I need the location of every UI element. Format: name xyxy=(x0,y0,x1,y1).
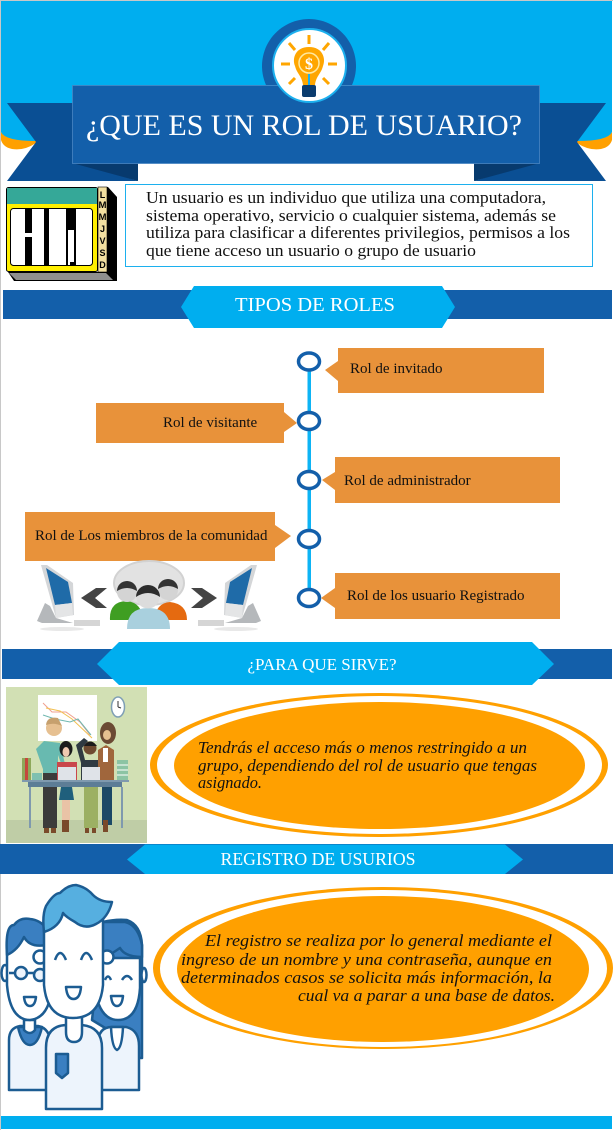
intro text box xyxy=(126,184,592,266)
section heading: para que sirve: ¿PARA QUE SIRVE? xyxy=(248,655,396,674)
intro text box: que tiene acceso un usuario o grupo de usuario xyxy=(146,241,476,260)
role: miembros xyxy=(25,512,291,561)
intro text box: sistema operativo, servicio o cualquier sistema, además se xyxy=(146,206,556,225)
icon: calendar: J xyxy=(100,224,105,234)
section heading: tipos de roles: TIPOS DE ROLES xyxy=(235,294,395,316)
icon: calendar: M xyxy=(98,200,106,210)
section heading: registro xyxy=(0,844,613,874)
icon: calendar: L xyxy=(100,190,106,200)
illustration: three people xyxy=(2,885,146,1109)
icon: calendar: V xyxy=(99,236,106,246)
title: ¿QUE ES UN ROL DE USUARIO? xyxy=(86,109,522,142)
callout: para que sirve: asignado. xyxy=(198,773,262,792)
callout: registro: determinados casos se solicita más información, la xyxy=(181,968,552,987)
footer bar xyxy=(1,1116,612,1129)
role: registrado xyxy=(321,573,560,619)
icon: calendar xyxy=(6,187,117,281)
section heading: registro: REGISTRO DE USURIOS xyxy=(220,849,416,869)
banner ribbon xyxy=(7,86,606,181)
callout: registro: El registro se realiza por lo general mediante el xyxy=(204,931,552,950)
illustration: team at desk xyxy=(6,687,147,843)
intro text box: Un usuario es un individuo que utiliza una computadora, xyxy=(146,188,546,207)
icon: light bulb badge xyxy=(262,19,356,102)
section heading: para que sirve xyxy=(2,642,612,685)
role: invitado: Rol de invitado xyxy=(350,361,442,377)
callout: para que sirve xyxy=(150,693,608,837)
timeline xyxy=(298,353,320,606)
role: registrado: Rol de los usuario Registrado xyxy=(347,588,524,604)
role: administrador: Rol de administrador xyxy=(344,473,471,489)
role: miembros: Rol de Los miembros de la comunidad xyxy=(35,528,268,544)
callout: para que sirve: grupo, dependiendo del rol de usuario que tengas xyxy=(198,756,537,775)
callout: registro xyxy=(153,887,613,1049)
role: visitante xyxy=(96,403,297,443)
illustration: users and computers xyxy=(37,561,261,631)
role: invitado xyxy=(325,348,544,393)
intro text box: utiliza para clasificar a diferentes privilegios, permisos a los xyxy=(146,223,570,242)
header background xyxy=(1,1,612,149)
callout: para que sirve: Tendrás el acceso más o menos restringido a un xyxy=(198,738,527,757)
callout: registro: cual va a parar a una base de datos. xyxy=(298,986,555,1005)
icon: calendar: D xyxy=(99,260,106,270)
role: administrador xyxy=(322,457,560,503)
section heading: tipos de roles xyxy=(3,286,612,328)
icon: calendar: S xyxy=(99,248,106,258)
callout: registro: ingreso de un nombre y una contraseña, aunque en xyxy=(181,950,552,969)
role: visitante: Rol de visitante xyxy=(163,415,257,431)
icon: light bulb badge: $ xyxy=(305,56,313,73)
icon: calendar: M xyxy=(98,212,106,222)
